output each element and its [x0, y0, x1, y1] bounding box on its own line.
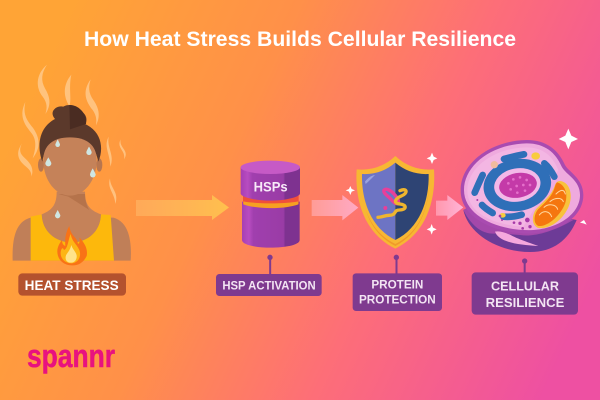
connector	[394, 255, 399, 274]
icon: cell: CELLULAR	[491, 279, 560, 294]
sparkles	[559, 129, 578, 149]
cell base	[463, 203, 577, 252]
nucleus	[479, 153, 555, 217]
tank top	[31, 214, 114, 261]
hair	[39, 105, 101, 162]
HSP activation label	[216, 274, 322, 296]
face	[43, 137, 97, 196]
icon: person under heat stress: HEAT STRESS	[25, 277, 119, 293]
icon: HSP cylinder: PROTECTION	[359, 293, 436, 307]
protein protection label	[353, 273, 442, 311]
organelles	[475, 154, 554, 217]
ears	[38, 158, 44, 172]
protein strand	[378, 189, 406, 217]
flame	[57, 226, 87, 265]
icon: HSP cylinder: PROTEIN	[371, 278, 423, 292]
shield	[356, 156, 434, 249]
cellular resilience label	[472, 272, 578, 315]
lower cylinder	[242, 202, 300, 248]
heat stress label	[18, 273, 126, 296]
connector	[522, 258, 527, 273]
orange band	[243, 195, 299, 207]
connector	[267, 255, 273, 275]
arrow: heat stress to HSP	[136, 195, 229, 220]
neck and chest	[42, 192, 101, 243]
upper cylinder	[241, 167, 300, 201]
icon: person under heat stress	[13, 65, 131, 296]
heat waves	[18, 65, 126, 204]
neck shadow	[58, 194, 89, 210]
icon: HSP cylinder	[216, 153, 442, 311]
mitochondrion	[533, 181, 571, 228]
sparkles	[346, 153, 437, 235]
shoulders and arms	[13, 218, 131, 261]
sweat drops	[45, 139, 96, 218]
icon: HSP cylinder: HSP ACTIVATION	[222, 279, 316, 293]
logo: spannr	[27, 338, 115, 374]
cell fold	[495, 231, 538, 246]
arrow: protection to cell	[436, 195, 463, 220]
cell membrane	[461, 140, 583, 233]
arrow: HSP to protection	[312, 195, 358, 220]
small vesicles	[531, 152, 540, 160]
HSPs text: HSPs	[254, 180, 288, 195]
title: How Heat Stress Builds Cellular Resilience	[84, 27, 516, 51]
icon: cell	[436, 129, 587, 315]
icon: cell: RESILIENCE	[486, 295, 565, 310]
